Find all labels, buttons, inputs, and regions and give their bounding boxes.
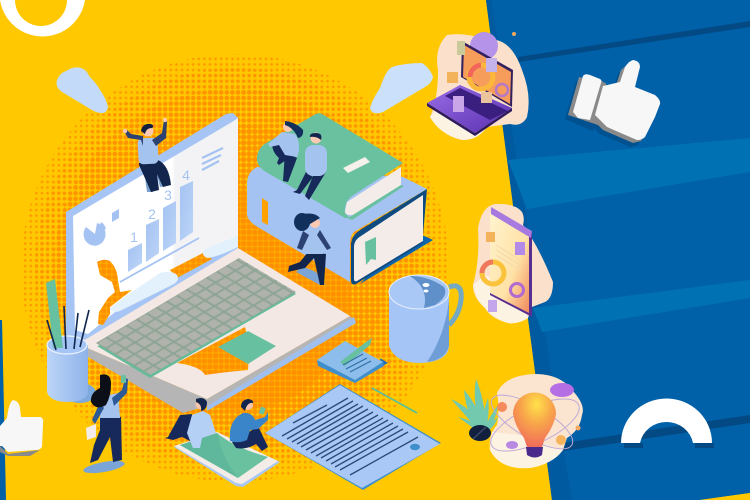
bulb base [526, 447, 543, 458]
bar chart: 3 [164, 187, 172, 203]
left edge blue strip [0, 320, 6, 500]
mug [389, 275, 461, 363]
phone gears [482, 262, 504, 284]
document [265, 384, 441, 490]
pen cup [46, 279, 96, 403]
thumb depth [568, 63, 656, 143]
laptop screen frame [66, 113, 238, 345]
badge blob [473, 204, 553, 323]
bulb concept badge [484, 374, 586, 468]
bar chart: 1 [130, 229, 138, 245]
laptop base [427, 85, 512, 133]
white arch [621, 399, 714, 448]
sitting person left [165, 398, 216, 448]
trackpad [218, 331, 276, 364]
bulb glass [513, 392, 556, 447]
gear top [470, 32, 498, 60]
laptop concept badge [427, 32, 529, 140]
standing woman [82, 374, 128, 476]
plant [451, 379, 498, 441]
floating tiles [457, 41, 465, 55]
thumb hand [595, 60, 660, 140]
clipboard [317, 338, 388, 383]
badge blob [490, 374, 583, 468]
thumb gap [588, 78, 606, 120]
phone tiles [486, 232, 495, 242]
green pen [372, 388, 417, 413]
bar chart [120, 167, 199, 282]
phone on floor [174, 432, 280, 487]
cloud left [57, 67, 108, 113]
pale screen reflection [110, 272, 178, 312]
badge blob [430, 34, 529, 140]
spine notch [262, 198, 268, 225]
upper book cover [257, 113, 403, 218]
gears around bulb [550, 383, 574, 397]
person sitting on screen [123, 118, 171, 192]
woman on book [268, 121, 303, 182]
blue panel right [486, 0, 750, 500]
stacked books [247, 113, 433, 284]
book label [343, 157, 370, 173]
halftone circle [21, 54, 449, 482]
melted screen gap [97, 260, 132, 325]
phone text lines [496, 245, 520, 270]
thumbs up left [0, 400, 43, 456]
laptop [66, 113, 356, 413]
pie chart [84, 209, 119, 246]
paper [86, 424, 96, 440]
upper book pages [345, 167, 401, 215]
orbit rings [484, 385, 586, 462]
thumb shadow [565, 67, 653, 147]
screen legend lines [202, 148, 223, 170]
bar chart: 4 [182, 167, 190, 183]
phone concept badge [473, 204, 553, 323]
laptop base edge [78, 316, 355, 413]
phone [490, 208, 532, 317]
thumbs up right [565, 60, 660, 147]
woman walking [288, 213, 331, 285]
laptop base [78, 248, 350, 399]
thumb cuff [573, 74, 601, 120]
base melted area [177, 327, 249, 375]
lower book navy base [360, 235, 433, 284]
white ring top left [0, 0, 85, 36]
laptop screen panel [73, 118, 238, 334]
bookmark [365, 237, 376, 265]
lower book pages and rim [351, 189, 427, 284]
bar chart: 2 [148, 206, 156, 222]
sitting person right [230, 399, 268, 451]
lower book cover [247, 167, 427, 282]
keyboard [96, 258, 296, 378]
cloud right [370, 63, 433, 113]
laptop screen [461, 41, 513, 107]
man on book [293, 132, 327, 200]
